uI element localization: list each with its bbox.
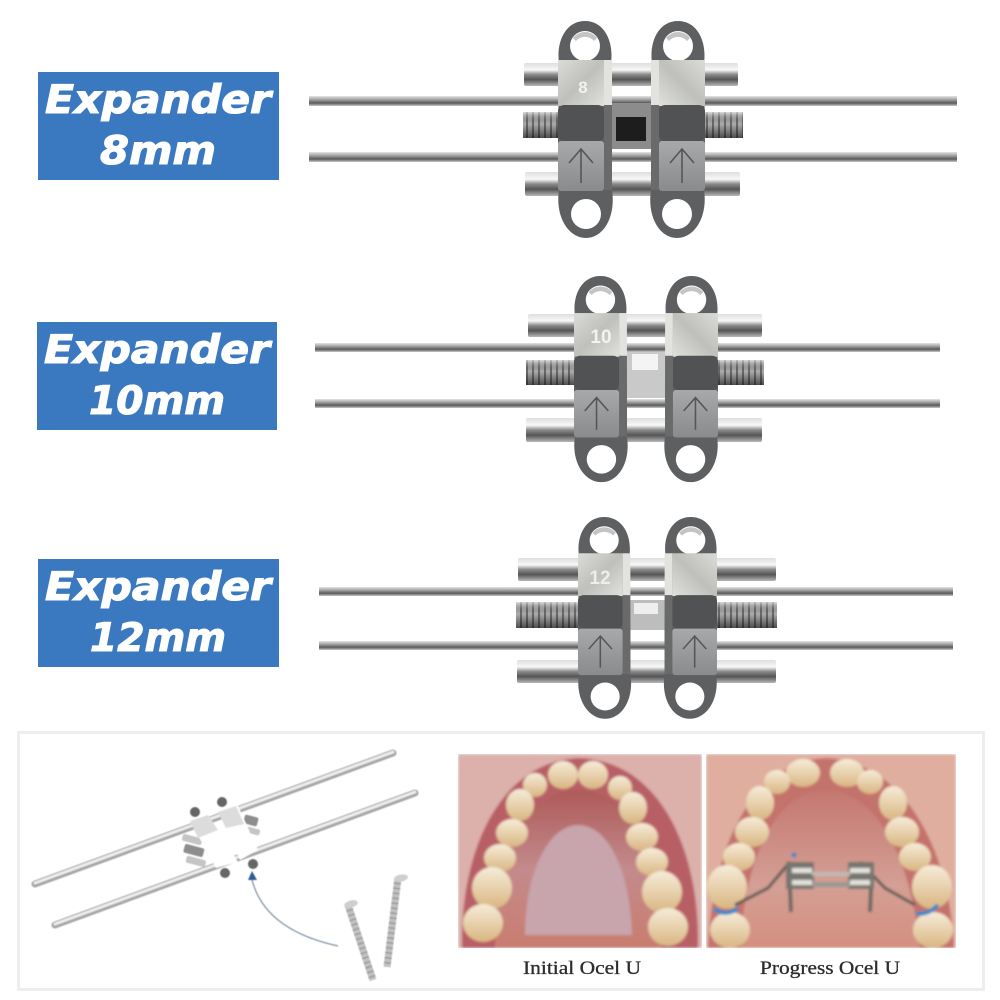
rods of the diagram bbox=[35, 752, 415, 925]
photo: initial occlusal view bbox=[458, 754, 702, 948]
expander 10mm photo: 10 bbox=[590, 327, 612, 348]
caption: Initial Ocel U: Initial Ocel U bbox=[523, 958, 641, 979]
expander 8mm photo: 8 bbox=[578, 78, 588, 97]
label: Expander 8mm: Expander bbox=[45, 78, 274, 123]
label: Expander 8mm bbox=[38, 72, 279, 180]
caption: Progress Ocel U: Progress Ocel U bbox=[760, 958, 900, 979]
icon: mini-screw bbox=[343, 899, 373, 980]
diagram: expander with mini-screws bbox=[35, 752, 415, 980]
label: Expander 12mm: 12mm bbox=[90, 616, 226, 661]
arrow: screw placement bbox=[248, 871, 338, 946]
label: Expander 10mm: Expander bbox=[44, 328, 273, 373]
label: Expander 10mm: 10mm bbox=[89, 379, 225, 424]
icon: mini-screw bbox=[387, 873, 409, 967]
photo: progress occlusal view with appliance bbox=[706, 754, 956, 948]
label: Expander 8mm: 8mm bbox=[100, 129, 216, 174]
expander 12mm photo: 12 bbox=[589, 568, 611, 589]
expander 10mm photo bbox=[315, 276, 940, 482]
expander 12mm photo bbox=[319, 517, 953, 719]
label: Expander 10mm bbox=[37, 322, 277, 430]
expander body of the diagram bbox=[182, 797, 261, 878]
expander 8mm photo bbox=[309, 21, 957, 238]
label: Expander 12mm: Expander bbox=[45, 565, 274, 610]
panel: installation and results bbox=[18, 732, 984, 990]
label: Expander 12mm bbox=[38, 559, 279, 667]
